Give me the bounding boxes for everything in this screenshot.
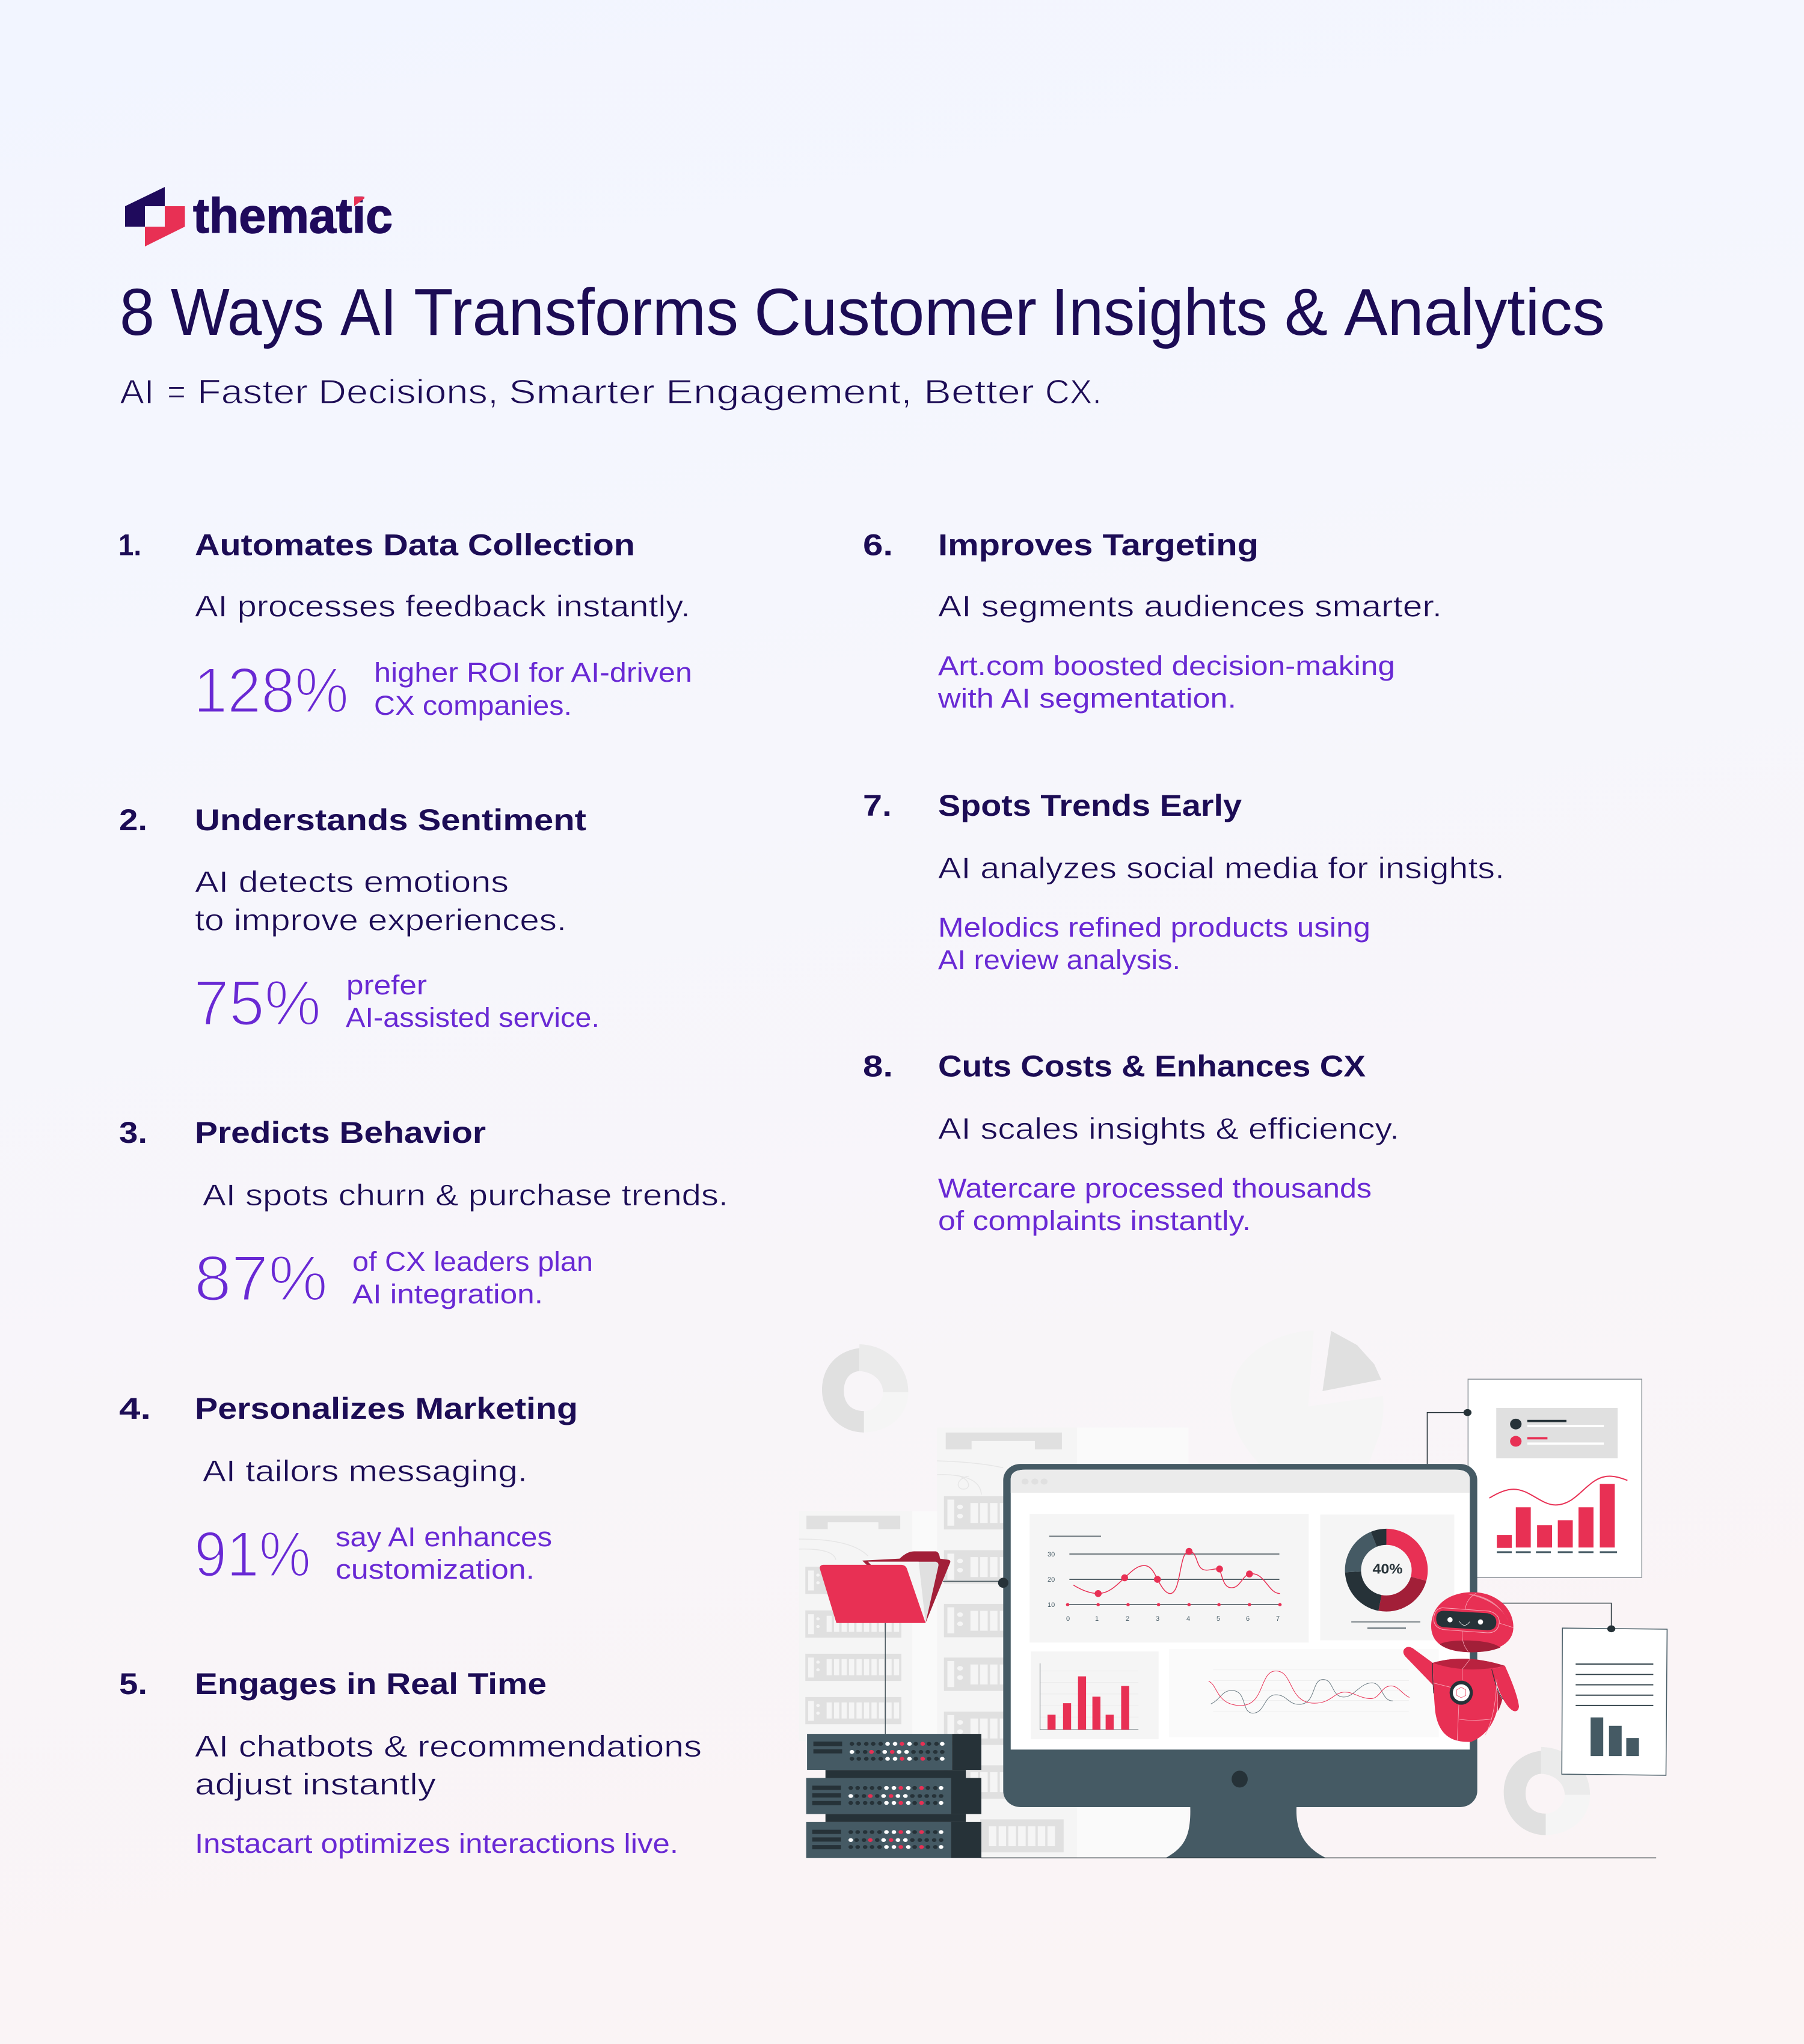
y axis labels: 20 [1048,1576,1055,1583]
robot head seams [1462,1593,1514,1651]
robot face [1447,1617,1483,1626]
number 4: 4. [119,1392,151,1425]
number 5: 5. [119,1667,147,1701]
subtitle: Smarter [509,373,655,411]
stat caption 3: of CX leaders plan [352,1246,593,1277]
title: & [1284,275,1328,349]
stat 128%: 128% [194,654,349,726]
faint server rack back [937,1428,1188,1858]
robot left arm [1404,1647,1433,1685]
x axis labels: 5 [1216,1615,1220,1623]
title: 8 [120,275,155,349]
stat 87%: 87% [194,1242,328,1314]
subtitle: Better [924,373,1034,411]
logo accent [354,197,364,206]
bar chart panel [1031,1651,1159,1739]
heading 5: Engages in Real Time [195,1667,547,1701]
body 4: AI tailors messaging. [203,1454,527,1488]
title: Customer [754,275,1037,349]
document: report with bars [1464,1379,1642,1577]
title: Ways [171,275,324,349]
robot side shading [1492,1669,1502,1712]
stat 91%: 91% [194,1518,311,1590]
item 6: improves targeting [863,528,1442,714]
robot body [1433,1659,1505,1742]
robot chin shade [1440,1641,1500,1652]
subtitle: AI [120,373,154,411]
stat caption 2: prefer [346,970,427,1000]
y axis labels: 30 [1048,1551,1055,1558]
heading 4: Personalizes Marketing [195,1392,578,1425]
line chart panel [1029,1514,1309,1642]
heading 6: Improves Targeting [938,528,1259,561]
title: Analytics [1344,275,1605,349]
number 3: 3. [119,1116,147,1149]
example 7 [938,912,1370,975]
title: Insights [1051,275,1268,349]
monitor stand [1166,1805,1325,1858]
stat caption 3 [352,1246,593,1309]
item 5: engages in real time [119,1667,702,1859]
monitor [1003,1464,1477,1858]
subtitle: Decisions, [318,373,499,411]
item 3: predicts behavior [119,1116,728,1314]
body 1: AI processes feedback instantly. [195,590,690,623]
x axis labels: 6 [1246,1615,1250,1623]
folder front [820,1565,925,1623]
heading 3: Predicts Behavior [195,1116,486,1149]
subtitle [120,373,1102,411]
robot head [1431,1592,1514,1652]
subtitle: Engagement, [666,373,912,411]
server 2 [806,1778,981,1814]
folder [820,1552,1008,1734]
server 1 [807,1734,981,1770]
stat caption 1: CX companies. [374,690,572,721]
body 5: AI chatbots & recommendations [195,1730,702,1763]
window bar [1011,1470,1470,1493]
robot body seams [1433,1659,1497,1740]
connector lines [885,1581,1003,1734]
title [120,275,1605,349]
example 7: AI review analysis. [938,944,1180,975]
folder pages [868,1562,939,1623]
heading 8: Cuts Costs & Enhances CX [938,1050,1366,1083]
robot chest badge [1450,1681,1473,1705]
robot visor [1436,1611,1496,1630]
stat caption 1 [374,657,692,721]
body 5 [195,1730,702,1801]
donut value 40%: 40% [1372,1561,1402,1576]
stat caption 4 [336,1522,552,1585]
title: AI [340,275,397,349]
logo mark [125,187,185,246]
logo wordmark: thematic [193,189,393,243]
example 8 [938,1173,1372,1236]
faint pie chart [1230,1330,1384,1464]
donut panel [1320,1514,1454,1641]
chart labels [1048,1551,1280,1623]
body 5: adjust instantly [195,1767,436,1801]
example 6: Art.com boosted decision-making [938,650,1395,681]
robot [1404,1592,1519,1742]
body 2: AI detects emotions [195,865,509,899]
y axis labels: 10 [1048,1602,1055,1609]
example 8: of complaints instantly. [938,1205,1251,1236]
body 7: AI analyzes social media for insights. [938,851,1505,885]
subtitle: CX. [1045,373,1102,411]
logo: thematic [125,187,393,246]
robot visor outline [1434,1608,1499,1633]
example 6 [937,650,1395,714]
robot head highlight [1467,1594,1508,1621]
stat caption 4: customization. [336,1554,535,1585]
stat caption 2 [346,970,600,1033]
title: Transforms [414,275,738,349]
home button [1232,1770,1248,1787]
wave chart panel [1169,1649,1439,1737]
monitor body [1003,1464,1477,1807]
robot right arm [1492,1666,1519,1711]
item 8: cuts costs and enhances cx [863,1050,1399,1236]
connector lines to documents [1427,1413,1612,1629]
x axis labels [1066,1615,1280,1623]
number 6: 6. [863,528,893,561]
body 6: AI segments audiences smarter. [938,590,1442,623]
x axis labels: 7 [1276,1615,1280,1623]
x axis labels: 1 [1095,1615,1099,1623]
server 3 [806,1822,981,1858]
stat caption 4: say AI enhances [336,1522,552,1552]
number 8: 8. [863,1050,893,1083]
server stack [806,1734,981,1858]
document: text and bars [1562,1626,1667,1775]
robot outlines [1432,1663,1503,1700]
example 6: with AI segmentation. [937,683,1236,714]
subtitle: = [167,373,186,411]
folder back [862,1552,950,1623]
example 5: Instacart optimizes interactions live. [195,1828,678,1859]
x axis labels: 0 [1066,1615,1070,1623]
item 2: understands sentiment [119,803,600,1039]
item 4: personalizes marketing [119,1392,578,1590]
body 8: AI scales insights & efficiency. [938,1112,1399,1146]
robot collar [1433,1659,1505,1669]
example 8: Watercare processed thousands [938,1173,1372,1204]
stat caption 3: AI integration. [352,1279,543,1309]
stat caption 1: higher ROI for AI-driven [374,657,692,688]
body 2: to improve experiences. [195,903,566,937]
stat caption 2: AI-assisted service. [346,1002,600,1033]
stat 75%: 75% [194,967,321,1039]
illustration: analytics dashboard [799,1330,1667,1858]
ground line [981,1857,1656,1858]
subtitle: Faster [197,373,308,411]
item 7: spots trends early [863,789,1505,975]
x axis labels: 3 [1156,1615,1159,1623]
x axis labels: 4 [1186,1615,1190,1623]
body 2 [195,865,566,937]
faint server rack front [799,1511,937,1741]
body 3: AI spots churn & purchase trends. [203,1178,728,1212]
faint donut top left [822,1344,908,1433]
faint donut bottom right [1504,1747,1590,1835]
x axis labels: 2 [1126,1615,1129,1623]
number 1: 1. [118,528,141,561]
example 7: Melodics refined products using [938,912,1370,943]
server spacers [826,1770,966,1822]
heading 7: Spots Trends Early [938,789,1242,822]
heading 1: Automates Data Collection [195,528,635,561]
screen [1011,1470,1470,1749]
y axis labels [1048,1551,1055,1609]
item 1: automates data collection [118,528,692,726]
heading 2: Understands Sentiment [195,803,586,837]
number 2: 2. [119,803,147,837]
number 7: 7. [863,789,892,822]
